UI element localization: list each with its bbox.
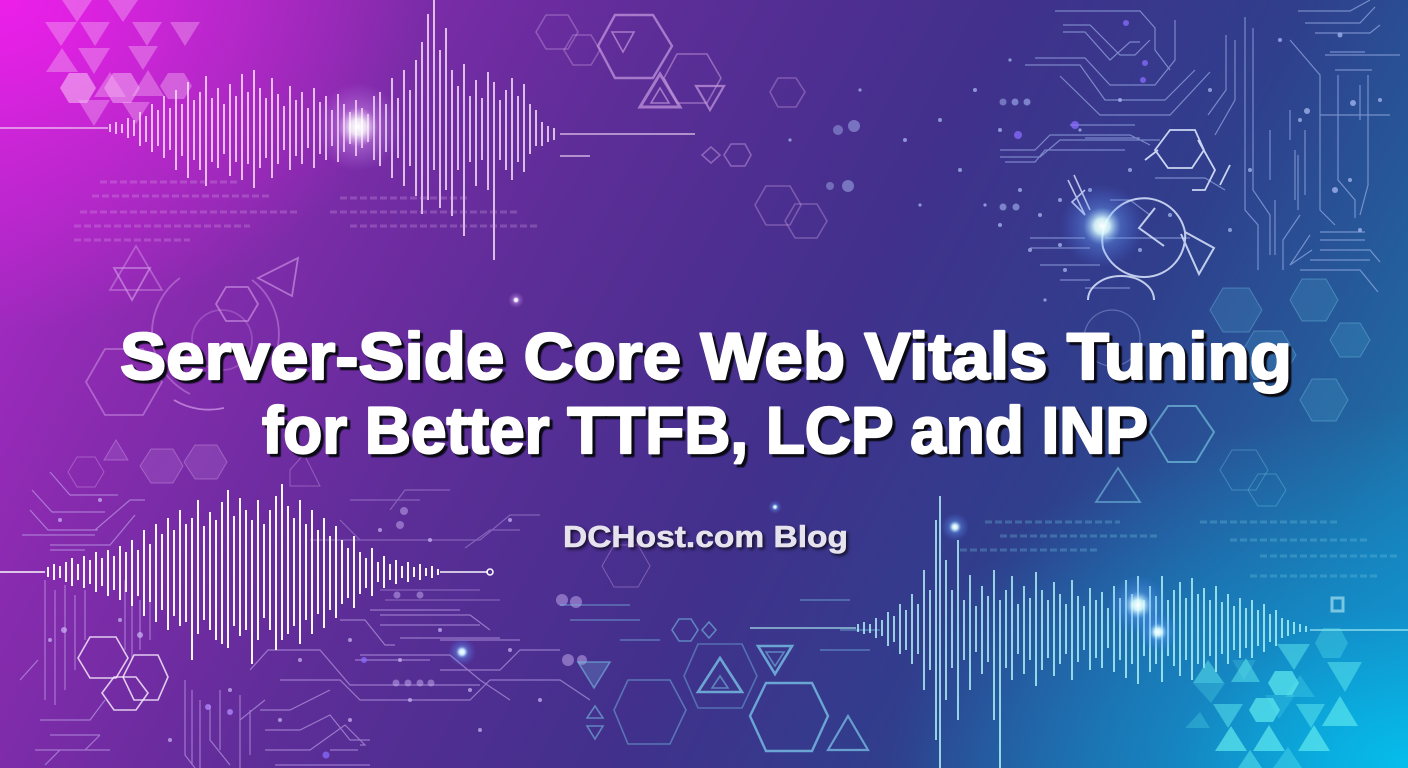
hexagon outlines: bottom left (78, 637, 168, 710)
waveform: bottom right (750, 496, 1408, 768)
subtitle: DCHost.com Blog (563, 519, 848, 554)
title: for Better TTFB, LCP and INP (262, 393, 1148, 467)
geometric shapes: left middle (86, 246, 298, 415)
hexagons: right middle (1096, 279, 1370, 506)
hexagons and triangles: bottom centre (560, 600, 880, 751)
triangle and hexagon cluster: bottom right (1185, 628, 1362, 768)
triangle and hexagon cluster: top left (45, 0, 200, 126)
waveform: top left (0, 0, 695, 260)
particle dots: top right (514, 20, 1382, 302)
title (120, 319, 1292, 467)
faint data lines: bottom right (960, 522, 1400, 576)
light glows (314, 83, 1178, 666)
icon: small square marker (1332, 598, 1343, 611)
faint hexagon fills: left lower (68, 440, 650, 587)
faint text-like data lines: top left (74, 182, 540, 240)
title: Server-Side Core Web Vitals Tuning (120, 319, 1292, 393)
particle dots: bottom left (48, 498, 587, 758)
circuit traces: bottom left (20, 472, 590, 768)
waveform: bottom left (0, 484, 493, 664)
circuit traces: top right (1000, 0, 1400, 366)
hexagon outlines: top centre (536, 15, 827, 238)
